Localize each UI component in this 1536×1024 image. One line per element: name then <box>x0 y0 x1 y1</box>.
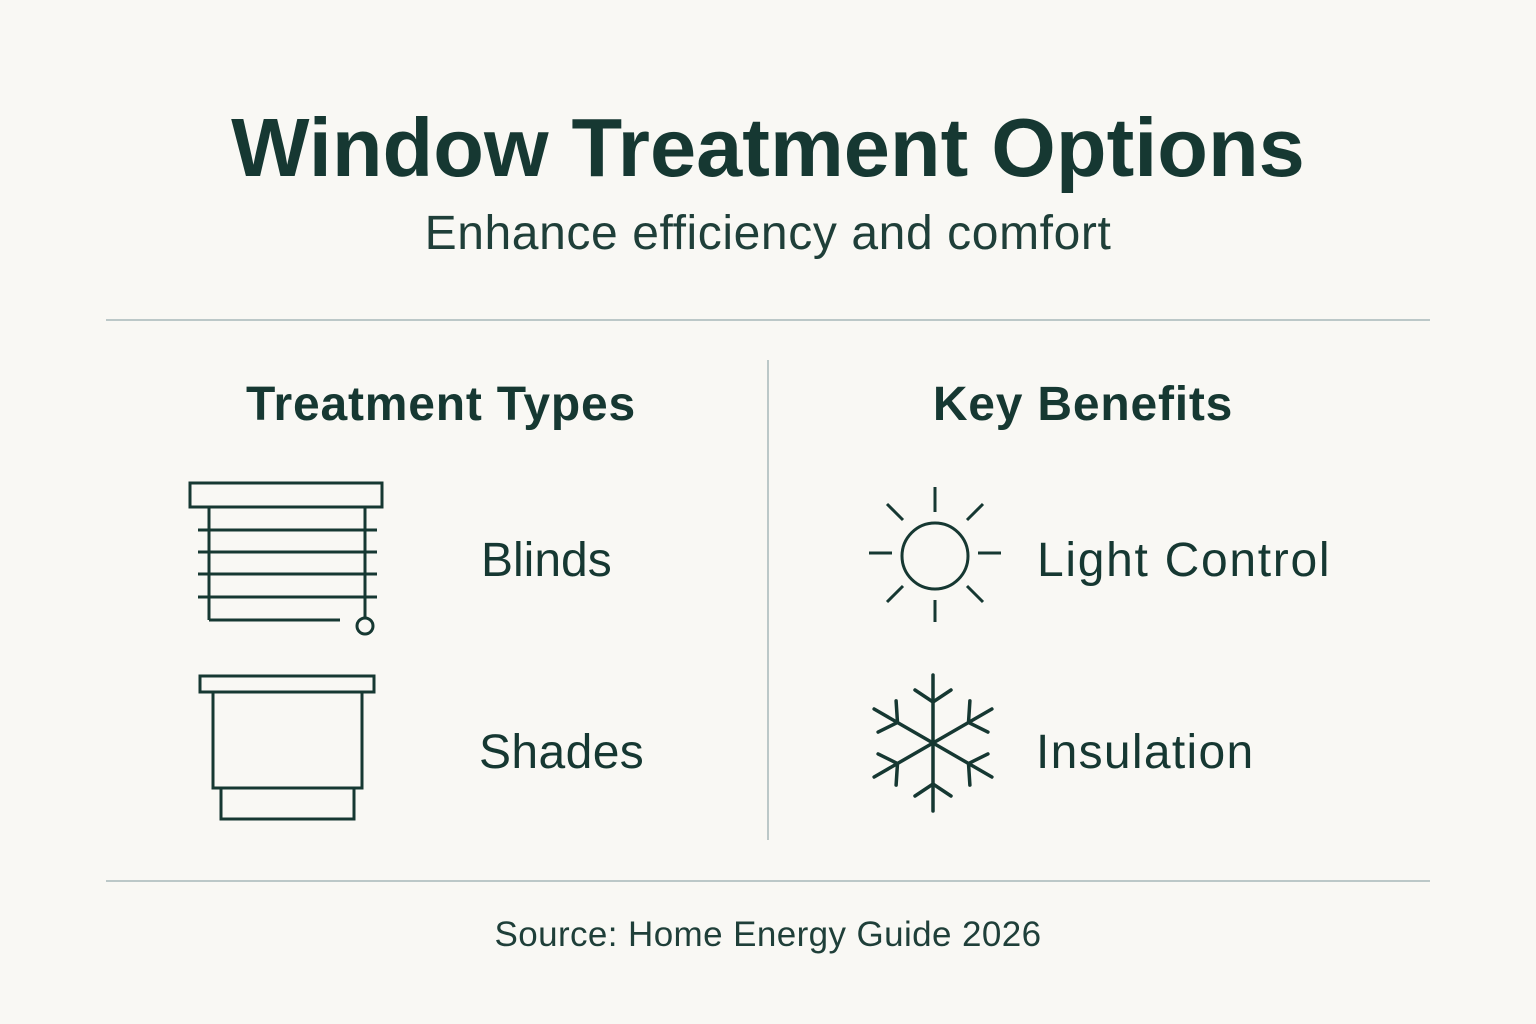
label: light control: Light Control <box>1037 534 1331 587</box>
panel: key benefits <box>869 378 1331 813</box>
label: insulation: Insulation <box>1036 726 1254 779</box>
title: Window Treatment Options <box>231 101 1305 194</box>
icon: blinds <box>188 482 384 636</box>
label: shades: Shades <box>479 726 644 779</box>
heading: treatment types: Treatment Types <box>246 378 636 431</box>
heading: key benefits: Key Benefits <box>933 378 1233 431</box>
label: blinds: Blinds <box>481 534 612 587</box>
icon: shades <box>198 674 376 820</box>
source: Source: Home Energy Guide 2026 <box>494 915 1042 954</box>
subtitle: Enhance efficiency and comfort <box>425 207 1111 260</box>
icon: snowflake <box>872 673 994 813</box>
icon: sun <box>869 487 1001 622</box>
panel: treatment types <box>188 378 644 820</box>
